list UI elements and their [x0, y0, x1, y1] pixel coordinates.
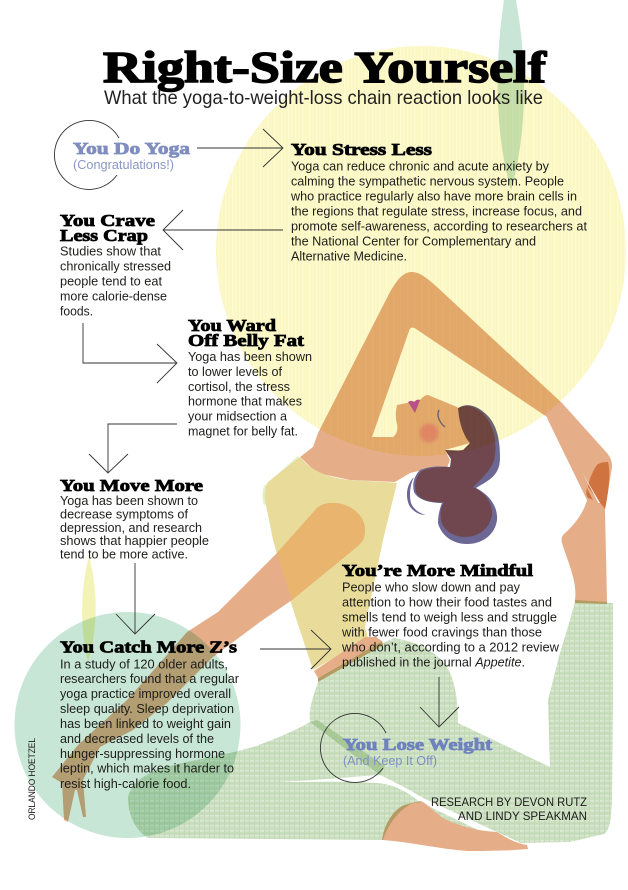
- hair: [407, 405, 500, 544]
- step body: calming the sympathetic nervous system. People: [291, 174, 564, 188]
- step heading: You Move More: [60, 476, 204, 495]
- arrow: mindful to lose weight: [420, 677, 459, 727]
- step body: magnet for belly fat.: [188, 424, 298, 438]
- step: you do yoga: [54, 120, 191, 189]
- skin: arms, neck, face and raised leg: [300, 272, 612, 602]
- step body: chronically stressed: [60, 258, 171, 274]
- step: you move more: [60, 476, 209, 562]
- thumb shadow: [586, 488, 593, 500]
- step body: Yoga has been shown to: [60, 493, 198, 508]
- step heading: You Catch More Z’s: [60, 638, 237, 656]
- arrow: move more to sleep: [116, 563, 155, 634]
- waistband: [318, 641, 383, 682]
- step body: [341, 580, 560, 670]
- step body: who practice regularly also have more brain cells in: [290, 188, 577, 204]
- step body: foods.: [60, 304, 93, 318]
- arrow: stress to cravings: [163, 210, 283, 250]
- left leaf: [82, 556, 96, 662]
- lips: [408, 400, 420, 413]
- step body: to lower levels of: [188, 364, 282, 379]
- step body: Yoga can reduce chronic and acute anxiety by: [291, 158, 549, 174]
- step body: researchers found that a regular: [60, 671, 240, 686]
- step heading: You Do Yoga: [73, 139, 191, 158]
- toes shadow: [588, 462, 609, 509]
- pants: [128, 602, 613, 843]
- arrow: belly fat to move more: [89, 424, 177, 473]
- step heading: Less Crap: [60, 226, 148, 245]
- illustrator credit: ORLANDO HOETZEL: [27, 738, 38, 820]
- step note: (And Keep It Off): [343, 753, 437, 768]
- step body: people tend to eat: [60, 274, 162, 288]
- hair fill: [415, 406, 496, 537]
- foot shadow: [382, 801, 422, 840]
- step body: the regions that regulate stress, increase focus, and: [291, 204, 582, 218]
- subtitle: What the yoga-to-weight-loss chain reaction looks like: [104, 87, 543, 109]
- step body: your midsection a: [188, 408, 288, 424]
- left arm: [52, 503, 365, 822]
- step heading: [188, 316, 304, 350]
- yellow sun circle: [216, 46, 626, 456]
- step body: tend to be more active.: [60, 546, 188, 562]
- foot: [382, 801, 528, 851]
- skin waist strip: [314, 637, 382, 678]
- arrow: yoga to stress: [197, 129, 283, 167]
- hair strand: [407, 477, 426, 515]
- cheek blush: [420, 424, 438, 442]
- step body: and decreased levels of the: [60, 731, 214, 746]
- step body: sleep quality. Sleep deprivation: [60, 701, 234, 716]
- step heading: You Crave: [60, 211, 156, 230]
- step body: with fewer food cravings than those: [341, 624, 542, 640]
- arrow: sleep to mindful: [260, 630, 331, 669]
- circle outline: [54, 120, 119, 189]
- hair outline: [413, 405, 500, 544]
- step body: [60, 656, 240, 791]
- top leaf: [498, 0, 524, 190]
- step body: [60, 493, 209, 562]
- step body: cortisol, the stress: [188, 379, 290, 394]
- eyelid: [438, 410, 445, 427]
- step body: hunger-suppressing hormone: [60, 746, 225, 761]
- hand mark: [582, 462, 609, 509]
- step body: attention to how their food tastes and: [342, 594, 552, 610]
- step body: has been linked to weight gain: [60, 716, 231, 731]
- step body: Alternative Medicine.: [291, 248, 407, 264]
- step heading: You Ward: [188, 316, 277, 335]
- pants gap: [280, 775, 521, 843]
- step body: Studies show that: [60, 244, 161, 258]
- title: Right-Size Yourself: [103, 43, 548, 92]
- step heading: [60, 211, 156, 245]
- step: you stress less: [290, 140, 587, 264]
- research credit: [431, 795, 587, 823]
- raised leg hem: [575, 599, 607, 604]
- step body: resist high-calorie food.: [60, 776, 191, 791]
- step heading: You Lose Weight: [343, 735, 492, 754]
- tank top: [265, 457, 397, 670]
- step body: smells tend to weigh less and struggle: [342, 610, 557, 624]
- circle outline: [320, 713, 386, 782]
- illustration: woman in yoga pose: [52, 272, 613, 851]
- left arm over tank: [277, 503, 365, 600]
- step: you crave less crap: [60, 211, 171, 318]
- step heading: You’re More Mindful: [342, 561, 533, 580]
- step heading: You Stress Less: [291, 140, 432, 159]
- step body: depression, and research: [60, 520, 202, 535]
- research credit: AND LINDY SPEAKMAN: [458, 809, 587, 823]
- step body: hormone that makes: [188, 394, 302, 408]
- step body: shows that happier people: [60, 533, 209, 548]
- step body: who don’t, according to a 2012 review: [341, 640, 560, 654]
- step body: published in the journal Appetite.: [342, 654, 525, 670]
- step body: the National Center for Complementary and: [291, 234, 536, 248]
- step body: In a study of 120 older adults,: [60, 656, 228, 672]
- step body: yoga practice improved overall: [60, 686, 231, 701]
- step body: Yoga has been shown: [188, 349, 312, 364]
- step note: (Congratulations!): [73, 157, 174, 172]
- step: you ward off belly fat: [188, 316, 312, 438]
- step body: [60, 244, 171, 318]
- foot skin: [383, 802, 528, 851]
- step: you are more mindful: [341, 561, 560, 670]
- light edge of tank top: [262, 456, 302, 506]
- highlight: [582, 472, 600, 503]
- step body: leptin, which makes it harder to: [60, 760, 234, 776]
- pants shadow stripe: [310, 720, 385, 775]
- step: you catch more zs: [60, 638, 240, 791]
- step body: promote self-awareness, according to researchers at: [291, 218, 587, 234]
- arrow: cravings to belly fat: [83, 323, 177, 383]
- step: you lose weight: [320, 713, 492, 782]
- research credit: RESEARCH BY DEVON RUTZ: [431, 795, 587, 809]
- step body: decrease symptoms of: [60, 506, 188, 522]
- step heading: Off Belly Fat: [188, 331, 304, 350]
- step body: more calorie-dense: [60, 288, 167, 304]
- green moon circle: [14, 612, 240, 838]
- step body: [188, 349, 312, 438]
- step body: [290, 158, 587, 264]
- step body: People who slow down and pay: [342, 580, 520, 594]
